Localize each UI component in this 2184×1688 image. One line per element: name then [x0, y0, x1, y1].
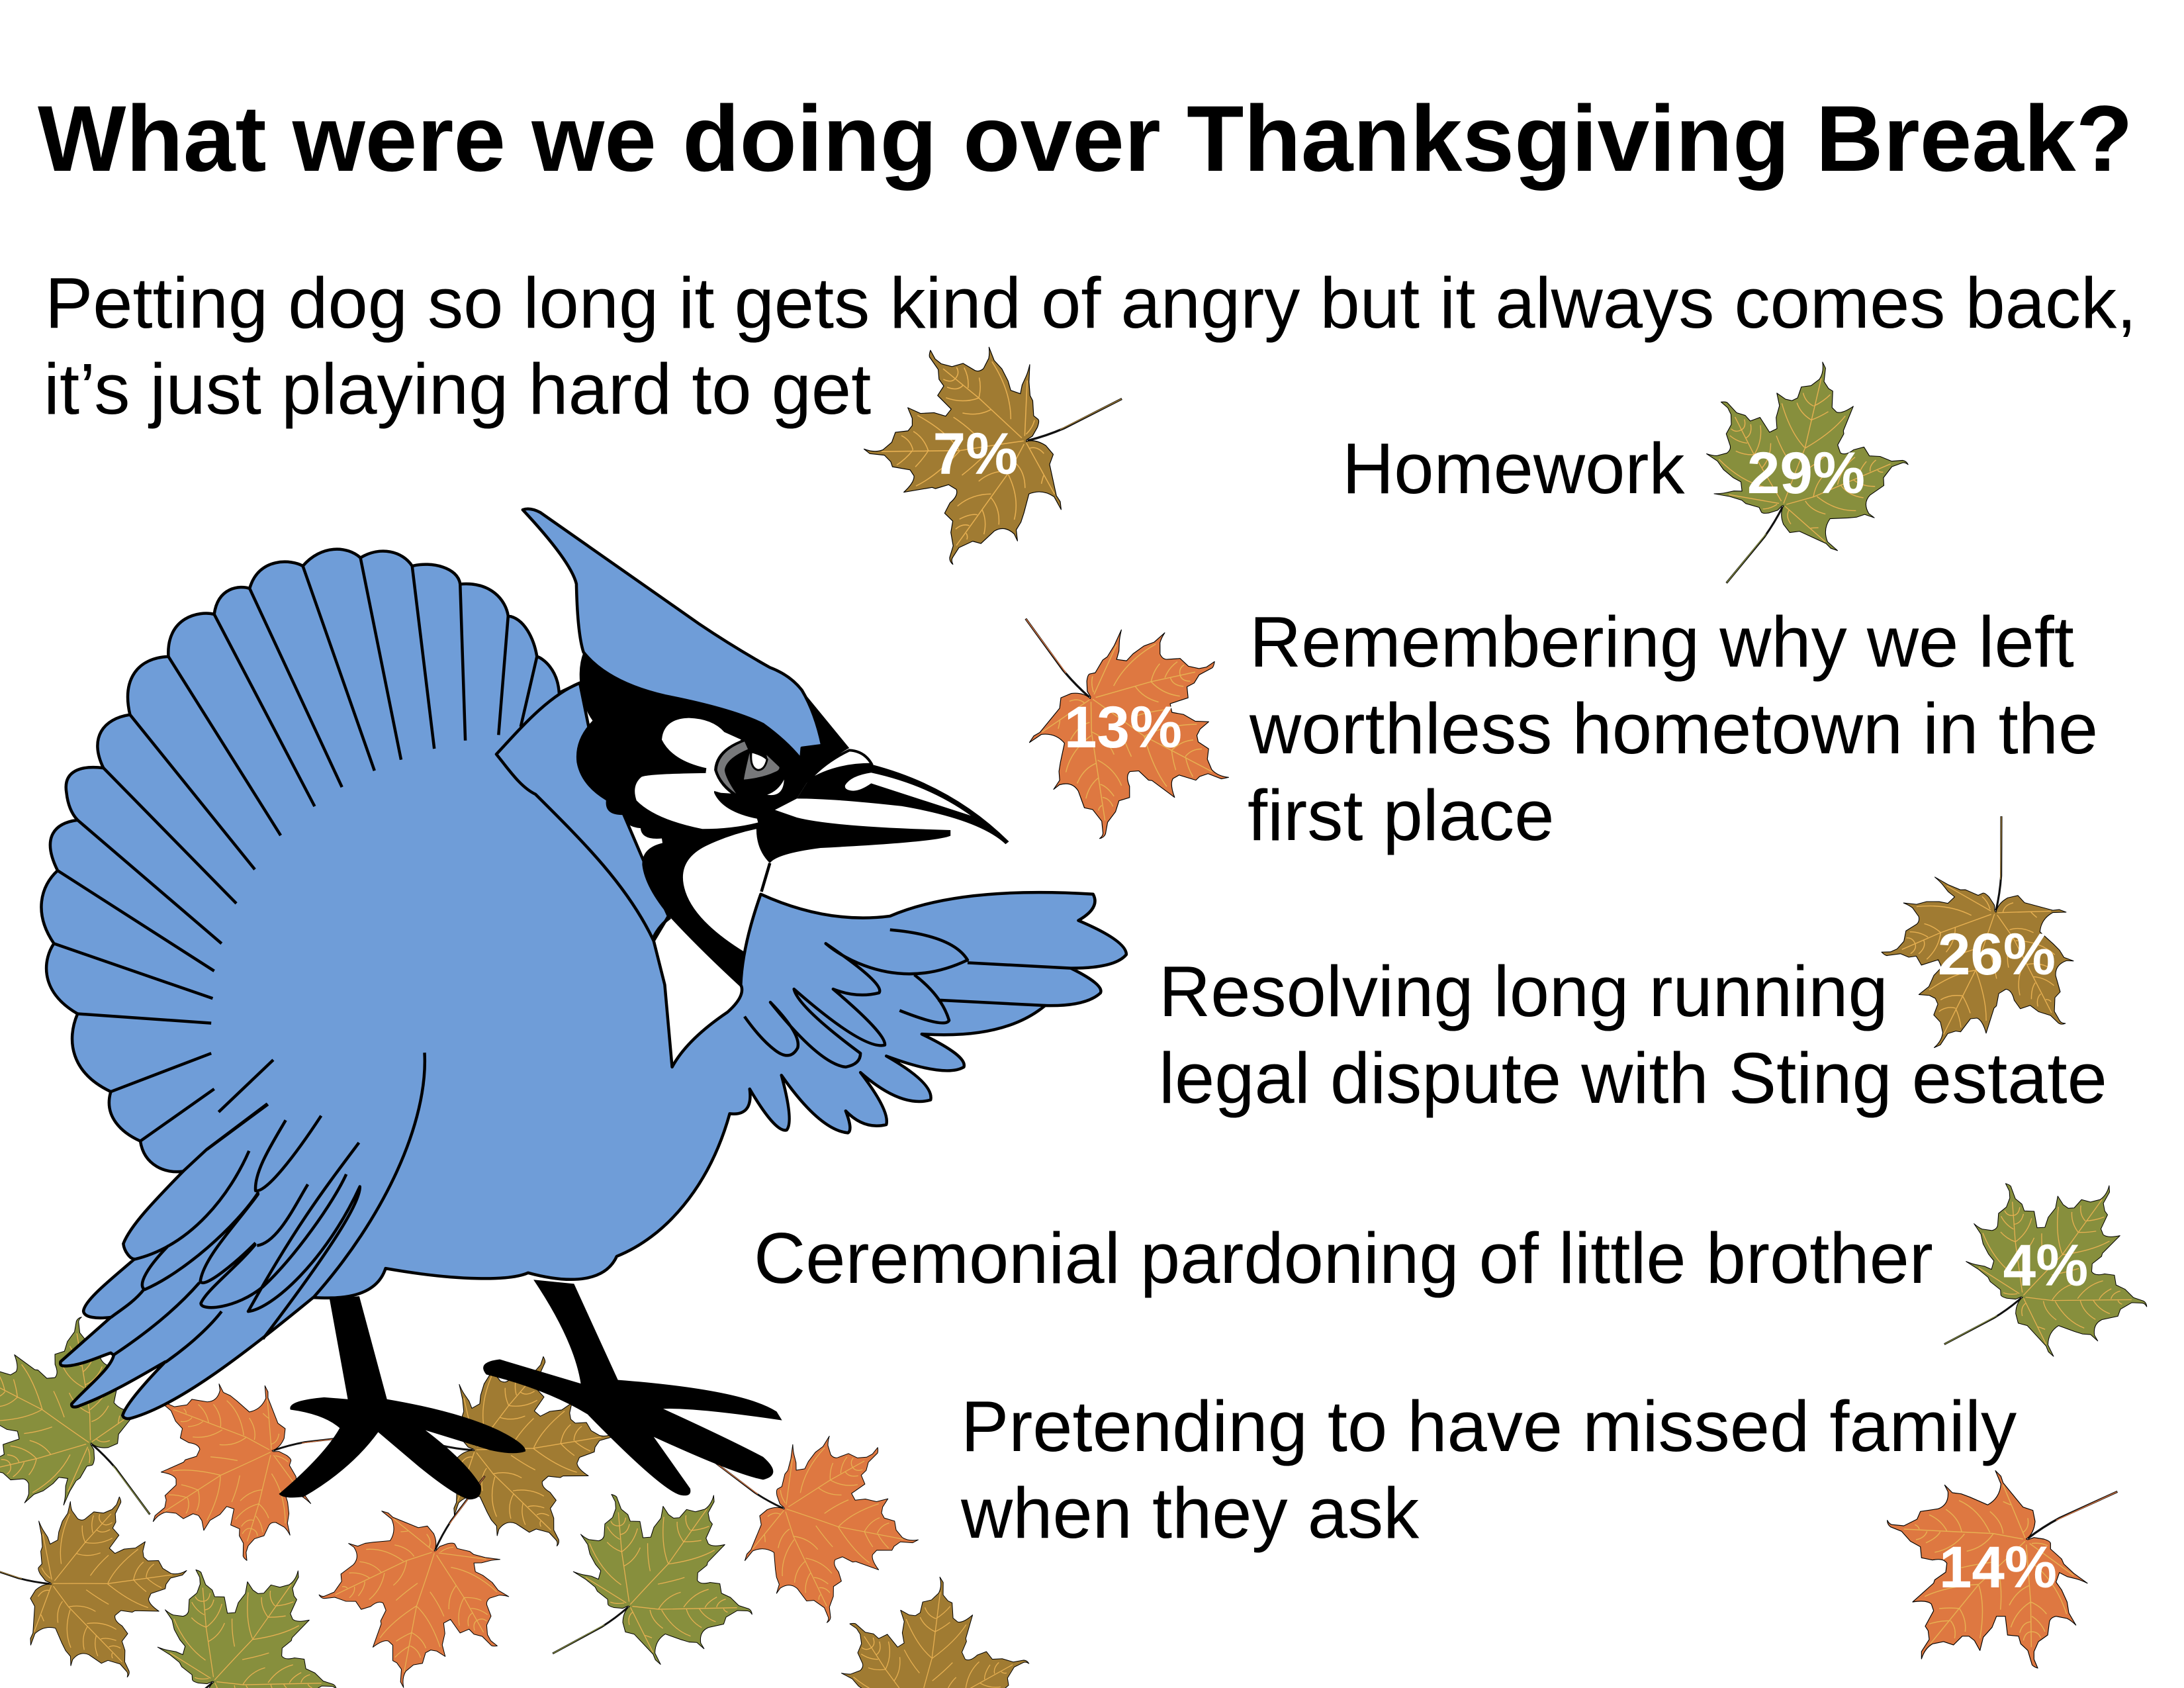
head with crest, mask and beak: [523, 509, 1009, 986]
beak highlights: [845, 773, 971, 816]
feather lines: tail fan: [54, 558, 537, 1171]
collar line: [496, 683, 654, 941]
black mask and throat band: [576, 652, 950, 986]
leaf: 4%: 4%: [2003, 1232, 2088, 1298]
leaf: 26%: 26%: [1938, 921, 2056, 987]
leaf: 26%: [1851, 808, 2108, 1080]
body, tail fan and wing: [41, 549, 1126, 1419]
leaf: 14%: [1888, 1471, 2117, 1668]
legs and feet: [279, 1280, 782, 1499]
text: resolving: Resolving long running: [1159, 951, 1888, 1031]
leaf: 29%: [1654, 340, 1929, 600]
throat lines: [653, 863, 770, 939]
leaf: 29%: 29%: [1747, 440, 1865, 506]
text: petting dog: it’s just playing hard to get: [44, 349, 871, 429]
title: What were we doing over Thanksgiving Break?: [38, 86, 2133, 191]
text: resolving: legal dispute with Sting estate: [1159, 1038, 2107, 1118]
blue jay turkey illustration: [41, 509, 1126, 1499]
leaf: 13%: [1005, 584, 1244, 849]
leaf: 7%: [835, 287, 1138, 596]
crest: [523, 509, 822, 759]
text: pretending: Pretending to have missed family: [961, 1386, 2017, 1466]
feather lines: lowered wing: [111, 1053, 425, 1362]
upper beak: [797, 765, 1009, 844]
leaf: green pile left: [0, 1308, 168, 1548]
text: ceremonial: Ceremonial pardoning of little brother: [754, 1218, 1933, 1298]
leaf: orange pile centre: [298, 1460, 559, 1688]
leaf: orange pile upper: [122, 1356, 366, 1582]
leaf: 13%: 13%: [1064, 694, 1182, 760]
leaf: brown pile left: [0, 1450, 213, 1688]
leaf: green pile bottom: [126, 1561, 340, 1688]
leaf: brown under right foot: [372, 1309, 645, 1579]
text: remembering: worthless hometown in the: [1249, 688, 2098, 769]
leaf: orange pile right: [695, 1387, 939, 1643]
eye: [714, 739, 787, 798]
leaf: 4%: [1935, 1176, 2150, 1363]
leaf: 14%: 14%: [1939, 1534, 2057, 1600]
text: petting dog: Petting dog so long it gets kind of angry but it always comes back,: [45, 263, 2136, 343]
leaf: 7%: 7%: [933, 420, 1018, 487]
text: homework: Homework: [1342, 428, 1685, 508]
text: remembering: first place: [1248, 775, 1554, 855]
leaf pile: [0, 1308, 1052, 1688]
text: pretending: when they ask: [960, 1473, 1420, 1553]
feather lines: raised wing: [745, 930, 1071, 1067]
face white patches: [662, 718, 741, 773]
leaf: brown pile bottom right: [791, 1554, 1052, 1688]
text: remembering: Remembering why we left: [1250, 602, 2074, 682]
leaf: green pile centre: [542, 1485, 755, 1672]
